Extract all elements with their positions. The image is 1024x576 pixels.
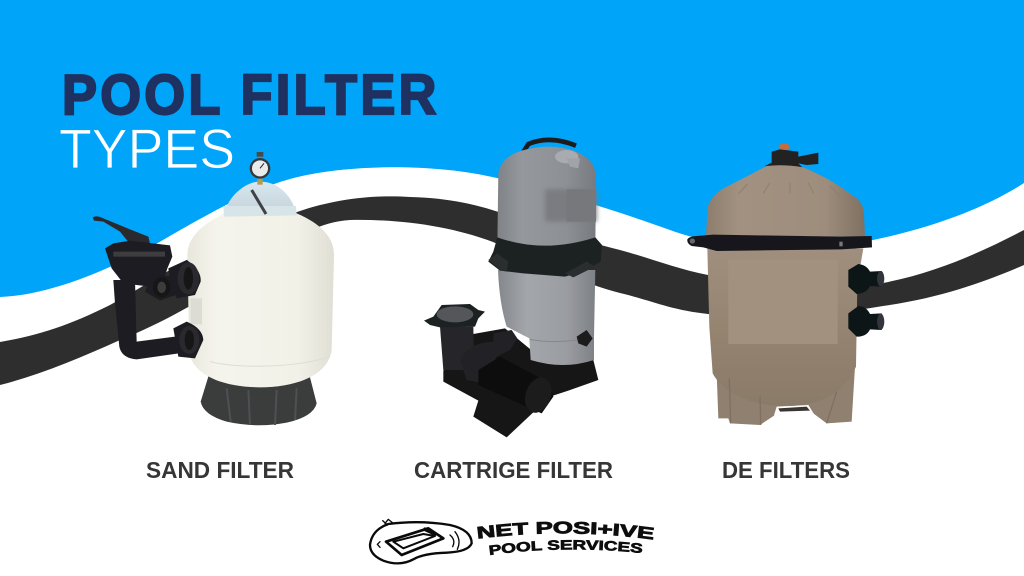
logo: Net Positive Pool Services [368, 518, 654, 564]
DE filter product illustration [687, 144, 884, 425]
logo wordmark [477, 521, 654, 556]
pressure gauge [250, 152, 270, 185]
label: sand filter: SAND FILTER [146, 457, 294, 483]
sand filter product illustration [93, 152, 334, 425]
background: white wave [0, 167, 1024, 576]
blurred label patch [545, 189, 597, 222]
label: DE filters: DE FILTERS [722, 457, 850, 483]
label on tank [191, 298, 202, 324]
pump base [443, 328, 598, 437]
blurred label patch [728, 260, 838, 344]
outlet fitting [577, 330, 593, 347]
lower tank [498, 270, 595, 365]
clear dome [223, 182, 297, 214]
multiport valve and pipes [93, 216, 203, 359]
lower body [707, 248, 863, 406]
bottom port [848, 306, 884, 337]
label: cartridge filter: CARTRIGE FILTER [414, 457, 613, 483]
top port [848, 264, 884, 294]
title [59, 62, 436, 180]
upper tank [497, 147, 596, 247]
top valve [765, 144, 818, 168]
background: dark wave band [0, 196, 1024, 385]
base stand [201, 373, 317, 425]
motor [478, 357, 553, 413]
upper dome [706, 165, 865, 237]
leg ribs [729, 378, 837, 425]
logo icon: pool outline with raft [370, 519, 472, 563]
carry handle [519, 140, 576, 158]
wordmark: Pool Services: POOL SERVICES [489, 540, 642, 556]
heading: Pool Filter: POOL FILTER [62, 62, 436, 126]
clamp band [488, 237, 602, 277]
heading: Types: TYPES [59, 117, 235, 180]
cartridge filter product illustration [424, 140, 602, 437]
strainer basket [440, 327, 474, 370]
clamp band [687, 235, 872, 251]
pump volute and piping [460, 330, 517, 383]
tank body [187, 213, 334, 387]
legs [717, 367, 855, 425]
wordmark: Net Positive: NET POSI+IVE [477, 521, 654, 540]
